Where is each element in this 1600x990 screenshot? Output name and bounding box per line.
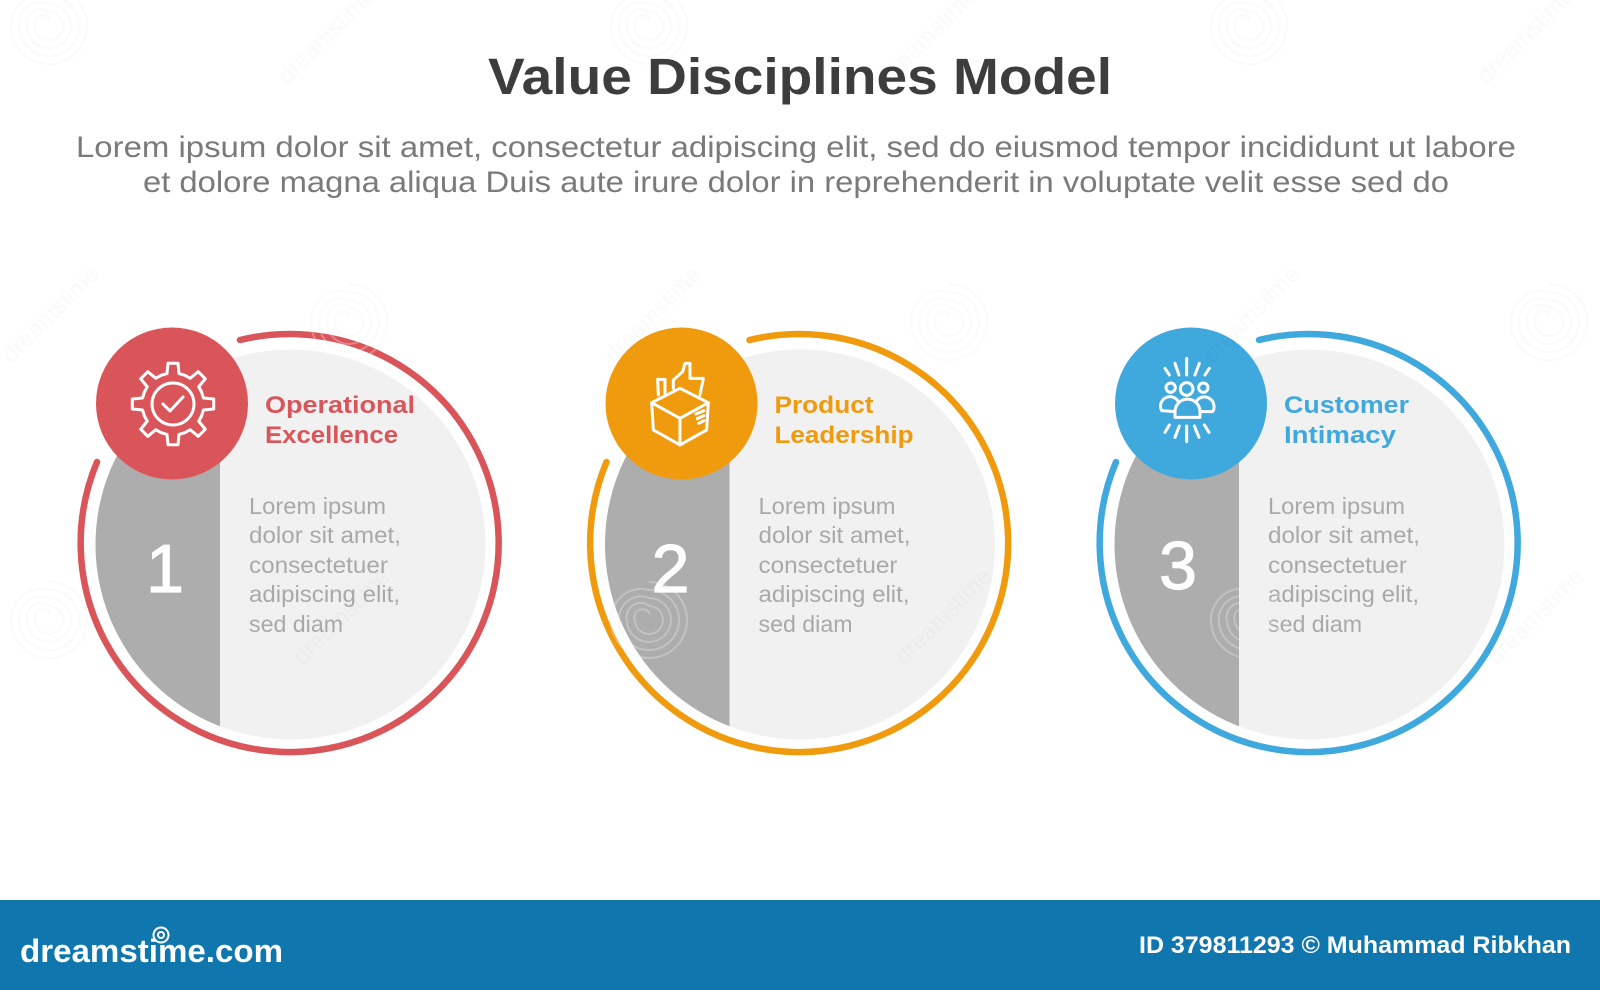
icon: logo spiral [154, 928, 168, 942]
body text: sed diam [1268, 611, 1362, 637]
subtitle: Lorem ipsum dolor sit amet, consectetur adipiscing elit, sed do eiusmod tempor incididunt ut labore [76, 131, 1516, 164]
outline ring [1100, 334, 1518, 752]
body text [249, 493, 401, 637]
watermark spirals [11, 0, 1587, 658]
heading: Excellence [265, 422, 398, 449]
icon: gear with check [132, 363, 214, 445]
image credit: ID 379811293 © Muhammad Ribkhan [1139, 932, 1571, 959]
disc background [96, 350, 486, 740]
watermark text: dreamstime [288, 563, 396, 671]
watermark text [0, 0, 1590, 671]
watermark text: dreamstime [1198, 261, 1306, 369]
title: Value Disciplines Model [488, 48, 1112, 105]
footer logo: dreamstime.com [20, 933, 283, 969]
watermark text: dreamstime [0, 261, 105, 369]
icon badge [606, 328, 758, 480]
panel: operational excellence [81, 328, 499, 752]
disc background [1114, 350, 1504, 740]
footer banner [0, 900, 1600, 990]
number band [96, 456, 220, 726]
outline ring [81, 334, 499, 752]
body text [758, 493, 910, 637]
number: 1 [146, 531, 184, 607]
watermark text: dreamstime [1482, 563, 1590, 671]
outline ring [590, 334, 1008, 752]
icon badge [96, 328, 248, 480]
heading: Customer [1284, 392, 1409, 419]
body text: sed diam [758, 611, 852, 637]
body text: Lorem ipsum [1268, 493, 1405, 519]
icon: team with rays [1161, 358, 1214, 442]
body text: adipiscing elit, [249, 581, 400, 607]
body text: dolor sit amet, [1268, 522, 1420, 548]
body text: dolor sit amet, [758, 522, 910, 548]
heading: Leadership [774, 422, 914, 449]
subtitle [76, 131, 1516, 199]
number band [1114, 456, 1239, 726]
watermark text: dreamstime [599, 261, 707, 369]
subtitle: et dolore magna aliqua Duis aute irure dolor in reprehenderit in voluptate velit esse sed do [143, 166, 1449, 199]
body text: adipiscing elit, [1268, 581, 1419, 607]
number band [605, 456, 730, 726]
heading: Operational [265, 392, 415, 419]
body text: consectetuer [758, 552, 898, 578]
body text: sed diam [249, 611, 343, 637]
number: 2 [652, 531, 689, 607]
body text: dolor sit amet, [249, 522, 401, 548]
panel: customer intimacy [1100, 328, 1518, 752]
icon badge [1115, 328, 1267, 480]
heading [1284, 392, 1409, 449]
watermark text: dreamstime [890, 563, 998, 671]
heading: Product [774, 392, 874, 419]
number: 3 [1159, 528, 1197, 604]
body text: Lorem ipsum [249, 493, 386, 519]
body text: Lorem ipsum [758, 493, 896, 519]
heading [774, 392, 914, 449]
disc background [605, 350, 995, 740]
body text [1268, 493, 1420, 637]
icon: box with thumbs up [652, 363, 708, 445]
body text: adipiscing elit, [758, 581, 910, 607]
body text: consectetuer [1268, 552, 1407, 578]
heading: Intimacy [1284, 422, 1397, 449]
panel: product leadership [590, 328, 1008, 752]
body text: consectetuer [249, 552, 388, 578]
heading [265, 392, 415, 449]
